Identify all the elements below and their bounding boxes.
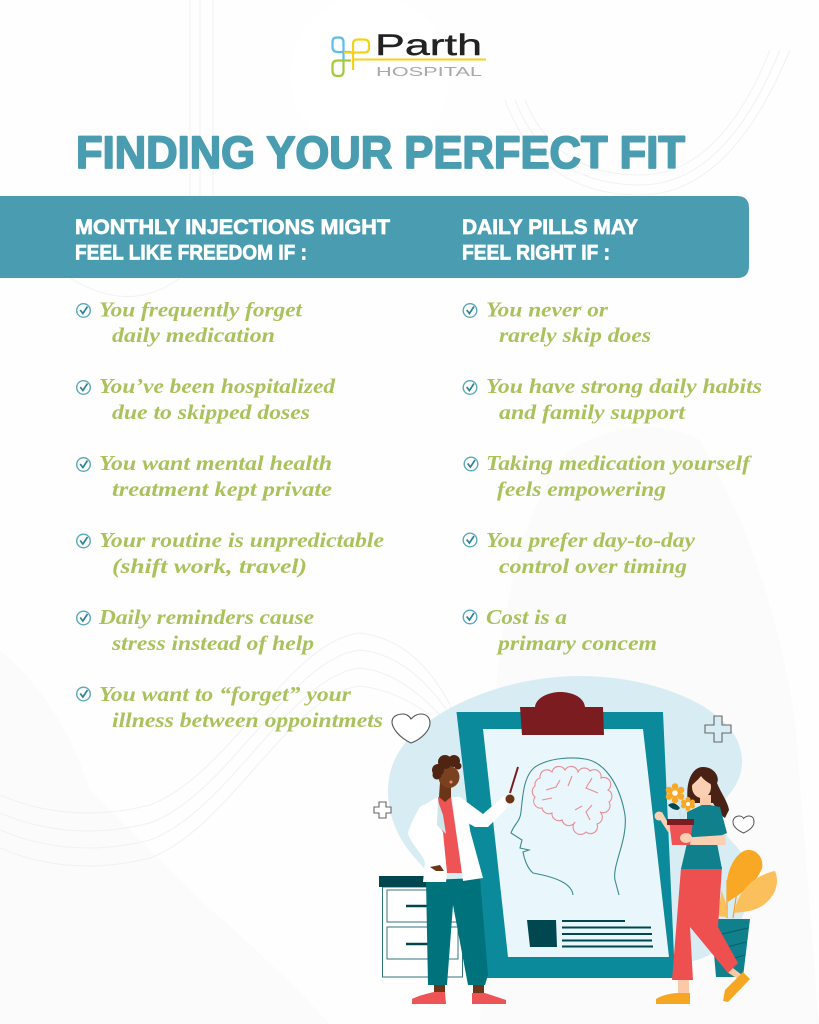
list: daily pills [463, 298, 762, 655]
item 3 [464, 451, 752, 501]
item 2: You’ve been hospitalized [99, 374, 336, 398]
trousers [426, 878, 488, 985]
woman [654, 767, 750, 1004]
item 1 [77, 298, 303, 347]
heading: monthly injections: MONTHLY INJECTIONS MIGHT [75, 216, 390, 239]
flowers [679, 800, 688, 819]
nose [450, 780, 452, 784]
logo underline [353, 58, 486, 60]
head outline [511, 758, 625, 895]
item 4 [463, 528, 696, 578]
neck [700, 795, 711, 808]
item 3: feels empowering [497, 477, 666, 501]
item 1 [463, 298, 651, 347]
item 5: Daily reminders cause [98, 605, 314, 629]
t-shirt [681, 805, 727, 869]
list: monthly injections [77, 298, 384, 732]
brain [532, 766, 612, 834]
item 2: You have strong daily habits [486, 374, 762, 398]
heading: daily pills: DAILY PILLS MAY [462, 216, 638, 239]
item 5 [463, 605, 657, 655]
arms [680, 835, 726, 845]
item 6: You want to “forget” your [99, 682, 352, 706]
back hair [687, 767, 729, 818]
logo icon [332, 38, 369, 76]
background blob [388, 676, 750, 966]
pointer [510, 767, 518, 793]
ankles [678, 965, 742, 994]
clipboard clip [520, 692, 604, 735]
document block [527, 920, 557, 947]
lab coat [408, 795, 508, 882]
item 5: Cost is a [486, 605, 567, 629]
flower pot [669, 820, 693, 845]
plant [711, 850, 777, 977]
item 4: control over timing [499, 554, 687, 578]
logo subtitle: HOSPITAL [376, 64, 482, 79]
item 3 [77, 451, 332, 501]
item 3: Taking medication yourself [486, 451, 752, 475]
title: FINDING YOUR PERFECT FIT [76, 127, 685, 178]
item 6 [77, 682, 383, 732]
item 5: stress instead of help [111, 631, 314, 655]
item 1: You never or [486, 298, 609, 322]
lapels [437, 797, 462, 834]
shoes [412, 992, 506, 1004]
item 4: (shift work, travel) [112, 554, 307, 578]
item 5 [77, 605, 314, 655]
item 4 [77, 528, 384, 578]
shoes [656, 993, 690, 1004]
item 2: and family support [499, 400, 686, 424]
ankles [434, 984, 484, 994]
doctor [408, 755, 518, 1004]
face [692, 776, 711, 798]
logo wordmark: Parth [375, 29, 482, 62]
item 5: primary concem [496, 631, 657, 655]
heading: daily pills: FEEL RIGHT IF : [462, 242, 610, 264]
trousers [672, 867, 738, 980]
illustration: doctor explaining brain chart [374, 676, 777, 1004]
heading: monthly injections [75, 216, 390, 264]
shirt [438, 797, 462, 873]
clipboard [456, 692, 675, 978]
item 4: Your routine is unpredictable [99, 528, 384, 552]
item 6: illness between oppointmets [112, 708, 383, 732]
cross outline left [374, 802, 391, 818]
neck and face [439, 782, 451, 802]
item 2 [77, 374, 336, 424]
item 3: treatment kept private [112, 477, 332, 501]
item 2 [463, 374, 762, 424]
fringe [691, 769, 713, 786]
heart outline small [733, 816, 754, 833]
hands [506, 794, 514, 804]
item 1: You frequently forget [99, 298, 303, 322]
cabinet [379, 876, 462, 977]
item 1: rarely skip does [499, 323, 651, 347]
heading: daily pills [462, 216, 638, 264]
cross outline right [705, 716, 731, 742]
item 1: daily medication [112, 323, 275, 347]
document lines [562, 921, 653, 946]
logo: Parth Hospital [332, 29, 486, 79]
heart outline large [392, 714, 430, 743]
heading: monthly injections: FEEL LIKE FREEDOM IF : [75, 242, 307, 264]
item 4: You prefer day-to-day [486, 528, 696, 552]
item 3: You want mental health [99, 451, 332, 475]
header band [0, 196, 749, 278]
hair [432, 755, 462, 780]
item 2: due to skipped doses [112, 400, 310, 424]
